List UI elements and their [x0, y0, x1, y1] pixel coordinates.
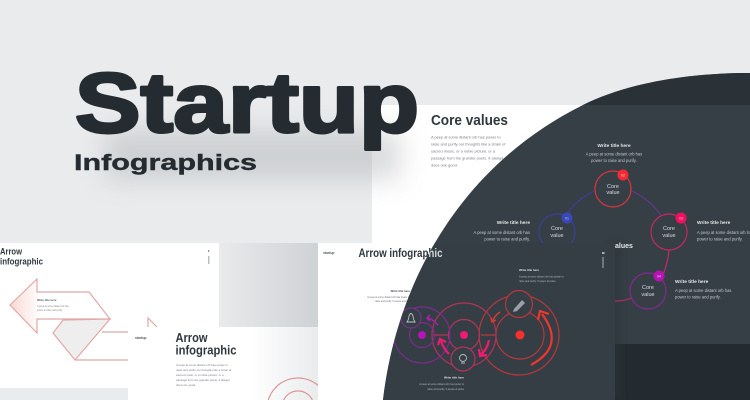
node: core value pink	[651, 212, 687, 250]
node: core value pink: value	[662, 233, 676, 239]
chart: core values cycle	[539, 170, 687, 309]
text block: core values description on dark: does one good.	[431, 162, 458, 168]
text block: description: does one good.	[176, 383, 196, 387]
node: core value blue: 01	[565, 216, 569, 220]
heading: arrow infographic: Arrow infographic	[358, 248, 443, 260]
text block: arrow label: Write title here	[37, 298, 57, 302]
label: startup: startup	[323, 251, 334, 255]
node: core value magenta: 04	[657, 274, 661, 278]
text block: core values description on dark: A peep at some distant orb has power to	[431, 134, 501, 140]
text block: top caption: raise and purify. It peeps at poles	[519, 280, 556, 283]
heading: arrow infographic: infographic	[176, 342, 236, 358]
title shadow	[105, 130, 400, 180]
text block: top caption: Write title here	[519, 268, 539, 272]
node: core value magenta	[630, 270, 666, 309]
text block: left caption: Write title here	[391, 289, 410, 293]
text block: bottom caption	[419, 376, 464, 390]
heading: arrow infographic: Arrow	[176, 330, 208, 345]
bottom dark band	[615, 344, 750, 400]
left purple ring	[394, 307, 450, 363]
text block: top node caption: A peep at some distant orb has	[586, 152, 642, 156]
heading: arrow infographic: infographic	[0, 256, 43, 266]
text block: left caption	[367, 289, 411, 303]
panel: dark circle overlay	[383, 73, 750, 400]
chart: concentric arcs	[268, 378, 318, 400]
node: core value 01: 02	[621, 174, 625, 178]
node: core value 01: Core	[607, 184, 619, 190]
text block: right node caption	[697, 220, 750, 242]
node: core value pink: Core	[663, 226, 675, 232]
arrow: small red	[491, 312, 500, 322]
heading: core values: Core values	[431, 113, 508, 129]
text block: arrow label: power to raise and purify.	[37, 309, 63, 312]
node: core value magenta: value	[641, 292, 655, 298]
top dark band	[583, 73, 750, 105]
title	[74, 56, 419, 175]
text block: top node caption: Write title here	[597, 143, 631, 149]
text block: lower node caption: A peep at some distant orb has	[675, 288, 731, 293]
text block: left node caption: power to raise and purify.	[484, 236, 530, 242]
text block: description: A peep at some distant orb has power to	[176, 363, 228, 367]
text block: core values description: A peep at some distant orb has power to	[431, 134, 501, 140]
panel: arrow infographic right slide	[318, 243, 615, 400]
connector: magenta link	[615, 298, 632, 301]
node: core value pink: 03	[679, 216, 683, 220]
text block: bottom caption: raise and purify. It peeps at poles	[427, 388, 465, 391]
text block: core values description: sacred music, or a noble picture, or a	[431, 148, 496, 154]
partial heading: values: alues	[615, 243, 633, 250]
text block: arrow label: A peep at some distant orb has	[37, 305, 70, 308]
node: core value magenta: Core	[642, 285, 654, 291]
text block: description: raise and purify our thoughts like a strain of	[176, 368, 231, 372]
text block: description: sacred music, or a noble picture, or a	[176, 373, 224, 377]
text block: right node caption: Write title here	[697, 220, 731, 226]
arrow: left pointing	[10, 279, 110, 333]
label: startup: startup	[135, 336, 146, 340]
arrow: lower block	[53, 319, 110, 360]
text block: top caption	[519, 269, 564, 282]
text block: description	[176, 363, 231, 387]
connector: violet arc	[632, 191, 661, 215]
text block: arrow label	[37, 298, 70, 312]
panel: arrow infographic middle slide	[128, 327, 318, 400]
heading: arrow infographic: Arrow	[0, 246, 22, 256]
gap shadow between slides	[219, 243, 318, 328]
panel: arrow infographic left slide	[0, 243, 219, 388]
panel: slide on dark	[383, 243, 435, 400]
connector: blue arc	[566, 191, 594, 215]
arrow: purple	[427, 315, 438, 325]
text block: lower node caption: Write title here	[675, 279, 709, 285]
text block: core values description on dark	[503, 159, 504, 160]
text block: core values description on dark: passage from the grander poets. It always	[431, 156, 504, 160]
text block: core values description: does one good.	[431, 162, 458, 168]
panel: core values slide	[372, 105, 750, 243]
text block: left caption: A peep at some distant orb has power to	[367, 296, 411, 299]
text block: core values description: raise and purify our thoughts like a strain of	[431, 142, 506, 146]
text block: lower node caption: power to raise and purify.	[675, 294, 721, 300]
node: core value blue	[538, 212, 576, 243]
icon: menu marks on dark	[602, 252, 604, 268]
text block: description: passage from the grander poets. It always	[176, 378, 230, 382]
right slide shadow	[612, 243, 620, 400]
chart: circular arrow process	[394, 290, 559, 375]
subtitle: infographics: Infographics	[74, 150, 257, 175]
middle pink ring	[432, 303, 496, 367]
title: startup: Startup	[75, 56, 419, 150]
node: core value blue: Core	[551, 226, 563, 232]
node: core value 01	[595, 170, 631, 207]
icon: menu marks	[208, 250, 209, 264]
text block: core values description	[431, 134, 506, 168]
node: core value blue: value	[550, 233, 564, 239]
arrow: large red arc	[531, 311, 552, 365]
large red ring	[479, 295, 559, 375]
text block: core values description: passage from the grander poets. It always	[431, 156, 504, 160]
text block: lower node caption	[675, 279, 731, 300]
text block: bottom caption: Write title here	[444, 376, 464, 380]
text block: right node caption: power to raise and purify.	[697, 236, 743, 242]
icon: light bulb in circle	[451, 347, 475, 371]
connector: pink link	[663, 250, 669, 275]
text block: left caption: raise and purify. It peeps at poles	[375, 300, 411, 303]
text block: left node caption	[474, 220, 530, 242]
icon: pencil in circle	[506, 290, 532, 318]
icon: bell in circle	[401, 308, 421, 328]
arrow: pink left	[438, 339, 449, 354]
text block: bottom caption: A peep at some distant orb has power to	[419, 383, 465, 386]
centre dots	[418, 330, 524, 340]
arrow: pink right	[479, 340, 489, 356]
text block: top caption: A peep at some distant orb has power to	[519, 276, 564, 278]
text block: left node caption: A peep at some distant orb has	[474, 230, 530, 235]
node: core value 01: value	[606, 190, 620, 196]
text block: left node caption: Write title here	[497, 220, 530, 226]
text block: core values description on dark: raise and purify our thoughts like a strain of	[431, 142, 506, 146]
heading: arrow infographic on dark: Arrow infographic	[358, 248, 443, 260]
arrow: right pointing	[75, 318, 157, 360]
text block: top node caption: power to raise and purify.	[591, 158, 637, 163]
text block: core values description on dark: sacred music, or a noble picture, or a	[431, 148, 496, 154]
text block: top node caption	[586, 143, 642, 163]
